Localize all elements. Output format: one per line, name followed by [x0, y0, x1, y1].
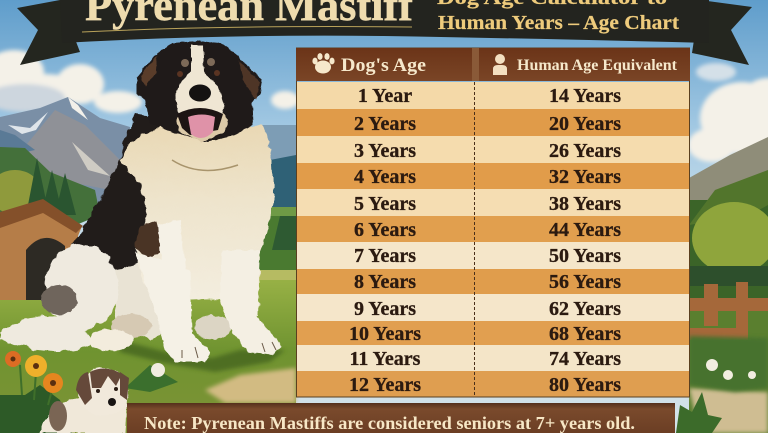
background: meadow	[0, 270, 296, 433]
table: human age column: 68 Years	[549, 323, 621, 345]
table: dog age column: 3 Years	[354, 140, 416, 162]
dog: front left leg	[135, 252, 211, 362]
background: trees right	[689, 170, 768, 300]
puppy	[40, 368, 129, 433]
table: header divider	[472, 48, 479, 81]
dog: mouth	[177, 108, 223, 135]
table: dog age column: 1 Year	[358, 85, 412, 107]
puppy: nose	[108, 398, 116, 406]
dog: mid hind paw	[111, 314, 151, 338]
table: dog age column: 10 Years	[349, 323, 421, 345]
dog: brown ear right	[238, 60, 260, 100]
dog: cream body and chest	[120, 125, 273, 340]
table: human age column: 32 Years	[549, 166, 621, 188]
dog: black back	[70, 115, 175, 275]
dog: eyebrow spots	[181, 58, 215, 67]
subtitle text: Human Years – Age Chart	[438, 12, 679, 34]
table: human age column: 38 Years	[549, 193, 621, 215]
dog: white front of shoulder	[158, 220, 190, 300]
table: dog age column: 9 Years	[354, 298, 416, 320]
ground path	[205, 368, 296, 403]
right foreground plants and flowers	[676, 336, 768, 433]
dog: collar	[172, 160, 238, 170]
dog: head black fur	[137, 41, 262, 142]
puppy: head	[78, 368, 128, 416]
table: human age column: 14 Years	[549, 85, 621, 107]
header: dog's age: Dog's Age	[341, 55, 426, 76]
table: dog age column: 7 Years	[354, 245, 416, 267]
dog: paw toe lines	[182, 342, 276, 358]
table: dog age column: 11 Years	[350, 348, 421, 370]
dog: haunch spot	[41, 285, 77, 315]
icon: paw	[312, 53, 335, 74]
dog: haunch	[46, 244, 118, 330]
puppy: side spot	[49, 401, 67, 431]
table: human age column: 74 Years	[549, 348, 621, 370]
table: dog age column: 4 Years	[354, 166, 416, 188]
table: human age column: 50 Years	[549, 245, 621, 267]
table: dog age column: 5 Years	[354, 193, 416, 215]
dog: brown ear left	[140, 56, 157, 86]
fence	[689, 282, 768, 340]
table: dog age column: 2 Years	[354, 113, 416, 135]
puppy: ears and brown head patches	[76, 368, 129, 405]
subtitle text	[437, 0, 679, 34]
puppy: body	[40, 398, 127, 433]
dog: tongue	[188, 114, 215, 138]
table: human age column: 62 Years	[549, 298, 621, 320]
main dog	[0, 41, 285, 372]
puppy: eyes	[96, 387, 118, 393]
background: left mountains	[0, 97, 296, 219]
note bar	[127, 403, 675, 433]
table: human age column	[549, 85, 621, 396]
table: human age column: 20 Years	[549, 113, 621, 135]
table: human age column: 80 Years	[549, 374, 621, 396]
dog: belly fur between haunch and leg	[112, 262, 165, 340]
table: human age column: 56 Years	[549, 271, 621, 293]
dog: white blaze and muzzle	[175, 45, 225, 116]
dog house	[0, 199, 83, 300]
banner: right tail	[692, 0, 752, 65]
icon: person	[493, 54, 507, 75]
table: header bar	[296, 48, 690, 81]
table: paper rows	[297, 82, 690, 397]
banner: left tail	[17, 0, 80, 65]
background: trees left	[0, 147, 100, 240]
table: dog age column	[349, 85, 421, 396]
dog: dark shoulder patch	[135, 223, 165, 257]
left flowers	[0, 351, 178, 433]
table: dog age column: 6 Years	[354, 219, 416, 241]
title banner	[17, 0, 752, 65]
dog: eyes	[177, 70, 220, 77]
table: border	[296, 48, 690, 397]
background: right mountain	[689, 137, 768, 205]
dog: hind paw	[89, 329, 133, 351]
table: column divider	[474, 82, 476, 397]
background: clouds	[0, 50, 768, 162]
background: trees behind right of dog	[258, 216, 296, 280]
dog: tail	[0, 316, 92, 351]
table: dog age column: 12 Years	[349, 374, 421, 396]
dog: nose	[189, 84, 211, 102]
dog: front right leg	[220, 250, 282, 355]
dog: under paw	[194, 315, 232, 339]
table: dog age column: 8 Years	[354, 271, 416, 293]
note text: Note: Pyrenean Mastiffs are considered seniors at 7+ years old.	[144, 413, 635, 433]
table: human age column: 26 Years	[549, 140, 621, 162]
banner: gold rule	[82, 27, 412, 32]
dog: cream bib under mouth	[176, 112, 228, 142]
header: human age equivalent: Human Age Equivalent	[517, 57, 678, 74]
dog: shadow under dog	[120, 340, 285, 372]
chart table	[296, 48, 690, 397]
table: human age column: 44 Years	[549, 219, 621, 241]
banner: main ribbon	[60, 0, 709, 43]
